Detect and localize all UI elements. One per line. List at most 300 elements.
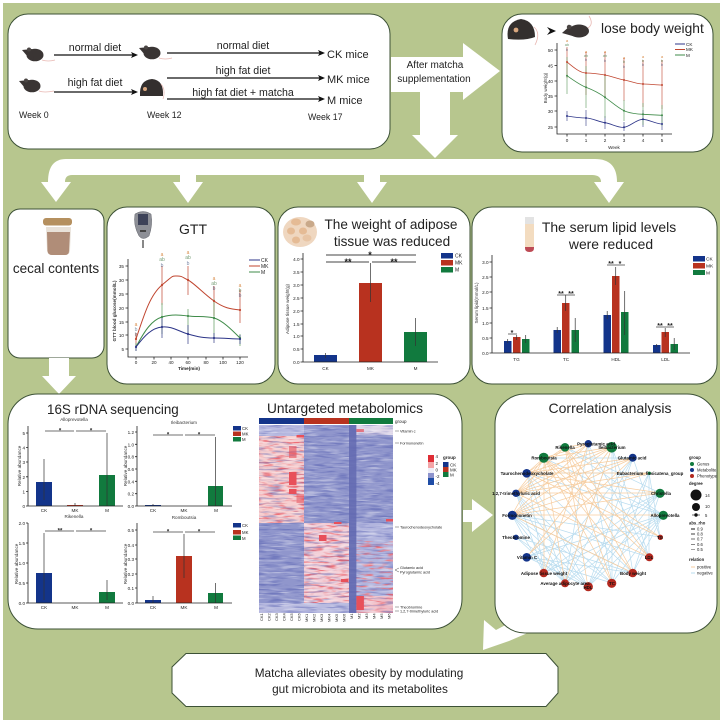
line chart: body weight: b	[566, 47, 569, 52]
line chart: body weight: Week	[608, 145, 621, 150]
legend: MK	[706, 264, 714, 270]
arrow: cecal to sequencing	[42, 358, 76, 394]
network legend: negative	[697, 570, 714, 576]
line chart: body weight: 40	[548, 79, 553, 84]
bar chart: Romboutsia: CK	[150, 605, 157, 610]
network nodes	[508, 440, 668, 591]
network node labels: Christella	[651, 491, 672, 496]
bar chart: serum lipids: TG	[513, 357, 520, 362]
bar chart: adipose weight: 1.0	[293, 334, 300, 339]
bar chart: Alloprevotella: Relative abundance	[17, 445, 22, 486]
line chart: body weight: 45	[548, 64, 553, 68]
bar chart: Ileibacterium: *	[198, 432, 201, 438]
line chart: GTT: b	[161, 263, 164, 269]
bar chart: Rikenella: 1.0	[19, 561, 25, 566]
legend: MK	[242, 530, 249, 535]
network node labels: Alloprevotella	[650, 513, 680, 518]
panel: cecal contents	[8, 209, 104, 358]
line chart: GTT: a	[213, 276, 216, 282]
line chart: body weight: a	[604, 49, 607, 54]
network legend: degree	[689, 481, 703, 486]
conclusion text	[255, 666, 463, 696]
conclusion text: Matcha alleviates obesity by modulating	[255, 666, 463, 680]
network node labels: Rikenella	[555, 445, 575, 450]
bar chart: Ileibacterium: Relative abundance	[123, 445, 128, 486]
week labels: Week 17	[308, 112, 343, 122]
line chart: GTT: a	[187, 250, 190, 256]
line chart: body weight: 50	[548, 48, 553, 53]
line chart: body weight: b	[623, 64, 626, 69]
line chart: body weight: 3	[623, 138, 626, 143]
bar chart: serum lipids: *	[619, 261, 622, 268]
legend: MK	[261, 264, 269, 270]
heatmap column labels: MK4	[326, 613, 332, 622]
heading: 16S: 16S rDNA sequencing	[47, 402, 179, 417]
heatmap column labels: CK1	[259, 612, 264, 621]
bar chart: Ileibacterium	[123, 420, 232, 513]
line chart: body weight: b	[604, 58, 607, 63]
bar chart: adipose weight	[285, 250, 438, 371]
line chart: body weight: 5	[661, 138, 664, 143]
bar chart: Ileibacterium: 1.2	[128, 430, 134, 435]
legend: M	[706, 270, 710, 276]
heatmap color scale: 4	[436, 454, 438, 459]
bar chart: Alloprevotella: 4	[22, 446, 25, 451]
network node labels: TC	[609, 581, 616, 586]
network legend: group	[689, 455, 701, 460]
line chart: GTT: 30	[119, 278, 124, 283]
network edges	[512, 444, 663, 587]
bar chart: serum lipids: 3.0	[482, 260, 489, 265]
line chart: GTT: GTT blood glucose(mmol/L)	[112, 280, 117, 342]
panel: lose body weight	[502, 14, 713, 152]
legend: CK	[242, 523, 248, 528]
bar chart: serum lipids: **	[558, 291, 564, 298]
bar chart: adipose weight: **	[344, 257, 352, 267]
bar chart: adipose weight: 2.0	[293, 309, 300, 314]
heatmap group legend: group	[443, 455, 456, 460]
heading: Correlation analysis	[549, 400, 671, 416]
bar chart: adipose weight: M	[414, 366, 418, 371]
line chart: body weight: 25	[548, 125, 553, 130]
heatmap group legend: M	[450, 472, 454, 478]
icon: mouse week 12 normal	[139, 46, 172, 59]
network node labels: Ileibacterium	[598, 445, 626, 450]
legend: CK	[242, 426, 248, 431]
network legend: abs_rho	[689, 520, 706, 526]
line chart: GTT: ab	[159, 257, 165, 263]
bar chart: serum lipids: *	[511, 330, 514, 337]
diet labels	[68, 40, 294, 99]
legend	[675, 42, 694, 58]
bar chart: Rikenella: **	[58, 528, 63, 534]
line chart: body weight: b	[623, 59, 626, 64]
group labels: MK mice	[327, 74, 370, 86]
diet labels: high fat diet + matcha	[192, 87, 294, 99]
bar chart: adipose weight: *	[368, 250, 372, 260]
bar chart: adipose weight: 3.5	[293, 270, 300, 275]
line chart: body weight: a	[661, 54, 664, 59]
bar chart: Alloprevotella: 5	[22, 431, 25, 436]
bar chart: serum lipids: LDL	[661, 357, 670, 362]
bar chart: Rikenella: 0.5	[19, 581, 25, 586]
heatmap column labels: M2	[356, 613, 362, 619]
heading: were reduced	[568, 236, 653, 252]
bar chart: Rikenella: MK	[72, 605, 79, 610]
legend: M	[261, 270, 265, 276]
bar chart: Rikenella: 0.0	[19, 601, 25, 606]
network node labels: 1,2,7-trimethyluric acid	[492, 491, 540, 496]
panel: serum lipid	[472, 207, 717, 384]
heading: cecal contents	[13, 261, 99, 276]
legend	[249, 258, 269, 276]
bar chart: serum lipids: 1.5	[482, 306, 489, 311]
bar chart: Alloprevotella: 2	[22, 475, 25, 480]
line chart: GTT: 15	[119, 320, 124, 325]
group labels: CK mice	[327, 49, 369, 61]
line chart: GTT: 40	[168, 360, 174, 365]
icon: obese mouse	[140, 79, 164, 99]
heatmap: group	[395, 419, 407, 424]
panel: GTT	[107, 207, 275, 384]
heatmap annotations: Theobromine	[400, 606, 422, 610]
arrow: after matcha supplementation: supplementation	[397, 74, 471, 85]
heatmap column labels: CK6	[296, 612, 302, 621]
bar chart: serum lipids: Serum lipid(mmol/L)	[474, 282, 479, 324]
bar chart: Rikenella: *	[90, 528, 93, 534]
bar chart: Romboutsia	[123, 515, 232, 610]
line chart: GTT: ab	[185, 255, 191, 261]
heatmap group legend: CK	[450, 462, 456, 468]
week labels	[19, 110, 343, 122]
heading: untargeted metabolomics: Untargeted metabolomics	[267, 401, 423, 416]
bar chart: serum lipids: **	[657, 323, 663, 330]
network legend: positive	[697, 564, 712, 570]
bar chart: Rikenella: Rikenella	[65, 514, 84, 519]
bar chart: adipose weight: 0.5	[293, 347, 300, 352]
bar chart: Romboutsia: 0.2	[128, 572, 134, 577]
group labels: M mice	[327, 95, 362, 107]
network node labels: Vitamin C	[517, 555, 538, 560]
bar chart: Alloprevotella: 0	[22, 504, 25, 509]
bar chart: adipose weight: 3.0	[293, 283, 300, 288]
heatmap annotations: Glutamic acid	[400, 566, 423, 570]
network node labels: Pyroglutamic acid	[577, 442, 615, 446]
line chart: body weight: b	[642, 62, 645, 67]
network node labels: Adipose tissue weight	[521, 571, 568, 576]
network legend: 0.6	[697, 542, 703, 547]
bar chart: Romboutsia: Relative abundance	[123, 543, 128, 584]
line chart: GTT: b	[239, 293, 242, 299]
bar chart: adipose weight: Adipose tissue weight(g)	[285, 284, 290, 334]
network node labels: LDL	[645, 555, 654, 560]
network node labels: Average adipocyte area	[540, 581, 590, 586]
line chart: body weight: a	[642, 54, 645, 59]
line chart: GTT: a	[135, 322, 138, 328]
heatmap column labels: MK3	[319, 613, 324, 622]
network legend: 0.5	[697, 547, 703, 552]
line chart: GTT: b	[213, 286, 216, 292]
line chart: body weight: 2	[604, 138, 607, 143]
network node labels: Body weight	[620, 571, 647, 576]
bar chart: adipose weight: CK	[322, 366, 330, 371]
network legend: Phenotype	[697, 474, 718, 478]
line chart: body weight: 1	[585, 138, 588, 143]
bar chart: adipose weight: MK	[367, 366, 375, 371]
bar chart: Romboutsia: 0.0	[128, 601, 134, 606]
legend: CK	[686, 42, 693, 47]
network legend: 0.7	[697, 536, 703, 542]
heatmap column labels: CK5	[289, 612, 294, 621]
bar chart: Ileibacterium: 1.0	[128, 442, 134, 447]
panel: experimental design	[8, 14, 390, 149]
arrow: to correlation	[463, 499, 493, 532]
bar chart: serum lipids: **	[568, 291, 574, 298]
legend	[233, 523, 249, 541]
legend: M	[242, 536, 246, 541]
bar chart: serum lipids: 0.5	[482, 336, 489, 341]
network node labels: Romboutsia	[531, 456, 557, 460]
heatmap	[259, 418, 407, 613]
arrows: diet	[54, 53, 323, 99]
legend: CK	[455, 254, 463, 260]
line chart: body weight: ab	[565, 42, 570, 47]
line chart: body weight: Body weight(g)	[543, 72, 548, 103]
panel: correlation analysis	[492, 394, 718, 633]
bar chart: Romboutsia: *	[167, 530, 170, 536]
icon: glucose meter	[134, 212, 152, 248]
line chart: GTT: b	[187, 261, 190, 267]
bar chart: serum lipids: TC	[563, 357, 570, 362]
network legend: 14	[705, 493, 710, 498]
bar chart: serum lipids: 2.5	[482, 275, 489, 280]
arrow	[547, 27, 556, 35]
bar chart: serum lipids: 0.0	[482, 351, 489, 356]
heatmap annotations: Taurochenodeoxycholate	[400, 526, 442, 530]
heading: The weight of adipose	[324, 217, 458, 232]
heading: lose body weight	[601, 21, 704, 36]
line chart: GTT: 80	[203, 360, 209, 365]
line chart: GTT: 60	[185, 360, 191, 365]
bar chart: Ileibacterium: 0.8	[128, 455, 134, 460]
bar chart: serum lipids: 2.0	[482, 290, 489, 295]
line chart: GTT: 25	[119, 292, 124, 297]
bar chart: serum lipids: HDL	[611, 357, 621, 362]
network legend	[689, 455, 718, 576]
legend: CK	[706, 256, 713, 262]
heatmap annotations: Formononetin	[400, 442, 423, 446]
bar chart: Romboutsia: Romboutsia	[172, 515, 197, 520]
icon: mouse week 0 high fat	[19, 78, 54, 92]
bar chart: Ileibacterium: CK	[150, 508, 157, 513]
line chart: GTT: b	[239, 288, 242, 294]
legend	[693, 256, 714, 276]
line chart: GTT: a	[161, 252, 164, 258]
bar chart: Ileibacterium: 0.4	[128, 479, 134, 484]
bar chart: Ileibacterium: 0.6	[128, 467, 134, 472]
heatmap color scale	[428, 454, 440, 486]
bar chart: Romboutsia: M	[214, 605, 218, 610]
legend	[233, 426, 249, 442]
legend: MK	[686, 47, 694, 52]
line chart: body weight: 0	[566, 138, 569, 143]
line chart: GTT: 35	[119, 264, 124, 269]
bar chart: Romboutsia: MK	[181, 605, 188, 610]
diet labels: high fat diet	[216, 65, 270, 77]
heatmap column labels: M5	[379, 613, 384, 619]
heatmap annotations: Pyroglutamic acid	[400, 570, 430, 574]
network node labels: Formononetin	[502, 513, 532, 518]
bar chart: Alloprevotella: 3	[22, 460, 25, 465]
bar chart: Rikenella: CK	[41, 605, 48, 610]
network legend: relation	[689, 557, 705, 562]
week labels: Week 0	[19, 110, 49, 120]
bar chart: Rikenella: 2.0	[19, 521, 25, 526]
legend	[441, 253, 463, 274]
heading: The serum lipid levels	[542, 219, 676, 235]
week labels: Week 12	[147, 110, 182, 120]
network node labels: Glutamic acid	[618, 456, 647, 460]
heatmap column labels: MK2	[312, 613, 316, 622]
bar chart: Ileibacterium: Ileibacterium	[171, 420, 197, 425]
bar chart: Romboutsia: *	[198, 530, 201, 536]
network node labels: Taurochenodeoxycholate	[501, 471, 554, 476]
bar chart: Ileibacterium: *	[167, 432, 170, 438]
bar chart: Alloprevotella: Alloprevotella	[60, 417, 88, 422]
line chart: GTT	[112, 250, 248, 371]
line chart: body weight: b	[661, 58, 664, 63]
heatmap column labels: MK6	[342, 613, 346, 622]
heatmap annotations	[395, 430, 442, 614]
bar chart: Romboutsia: 0.4	[128, 543, 134, 548]
heatmap column labels: CK3	[274, 612, 279, 621]
legend: MK	[455, 260, 463, 266]
bar chart: serum lipids: **	[667, 323, 673, 330]
line chart: body weight: 4	[642, 138, 645, 143]
bar chart: adipose weight: 2.5	[293, 296, 300, 301]
icon: lean mouse	[562, 16, 591, 38]
heatmap group legend	[443, 455, 457, 478]
line chart: GTT: b	[135, 332, 138, 338]
heatmap color scale: -2	[436, 474, 440, 479]
line chart: body weight: ab	[584, 53, 589, 58]
heatmap column labels: M3	[364, 613, 369, 619]
heatmap column labels	[259, 612, 392, 622]
network legend: Genus	[697, 462, 709, 466]
legend: M	[686, 53, 690, 58]
heatmap group legend: MK	[450, 468, 457, 472]
network legend: 0.8	[697, 532, 703, 536]
bar chart: Rikenella: 1.5	[19, 541, 25, 546]
diet labels: high fat diet	[68, 77, 122, 89]
network node labels: TG	[657, 535, 664, 540]
arrow: after matcha supplementation	[391, 43, 500, 158]
heading	[542, 219, 676, 252]
bar chart: Ileibacterium: MK	[181, 508, 188, 513]
heatmap column labels: M6	[386, 613, 392, 619]
legend: CK	[261, 258, 269, 264]
heatmap column labels: MK1	[304, 613, 309, 622]
network node labels: HDL	[583, 585, 593, 590]
line chart: body weight: a	[566, 38, 569, 43]
line chart: body weight: 30	[548, 109, 553, 114]
heatmap annotations: Vitamin c	[400, 430, 416, 434]
bar chart: adipose weight: **	[390, 257, 398, 267]
network node labels	[492, 442, 684, 590]
heatmap color scale: -4	[436, 481, 440, 486]
bar chart: Ileibacterium: 0.0	[128, 504, 134, 509]
icon: adipose tissue dish	[283, 217, 317, 247]
bar chart: Alloprevotella: *	[90, 428, 93, 434]
line chart: GTT: 20	[119, 306, 124, 311]
bar chart: Rikenella: Relative abundance	[14, 543, 19, 584]
line chart: GTT: a	[239, 283, 242, 289]
network legend: 0.9	[697, 526, 703, 532]
bar chart: adipose weight: 0.0	[293, 360, 300, 365]
bar chart: Romboutsia: 0.1	[128, 586, 134, 591]
bar chart: Rikenella	[14, 514, 123, 610]
heading	[324, 217, 458, 249]
diet labels: normal diet	[69, 42, 121, 54]
line chart: body weight: b	[661, 62, 664, 67]
bar chart: Alloprevotella: M	[105, 508, 109, 513]
network legend: 5	[705, 513, 708, 518]
line chart: GTT: 10	[119, 333, 124, 338]
arrow: after matcha supplementation: After matcha	[407, 60, 464, 71]
heatmap color scale: 0	[436, 468, 438, 472]
line chart: GTT: ab	[211, 281, 217, 287]
line chart: GTT: 120	[236, 360, 244, 365]
line chart: body weight: 35	[548, 94, 553, 99]
icon: sample cup	[43, 218, 72, 255]
line chart: body weight	[543, 38, 672, 150]
network legend: 10	[705, 504, 710, 509]
bar chart: serum lipids	[474, 255, 690, 362]
network node labels: Theobromine	[502, 535, 530, 540]
network node labels: Eubacterium_fissicatena_group	[617, 471, 684, 476]
heatmap column labels: CK2	[266, 612, 272, 621]
heatmap column labels: M1	[349, 613, 354, 619]
bar chart: Ileibacterium: M	[214, 508, 218, 513]
bar chart: serum lipids: 1.0	[482, 321, 489, 326]
line chart: body weight: a	[585, 49, 588, 54]
group labels	[327, 49, 370, 107]
diet labels: normal diet	[217, 40, 269, 52]
line chart: GTT: 20	[151, 360, 157, 365]
network legend: Metabolite	[697, 468, 717, 472]
heatmap column labels: M4	[372, 613, 376, 619]
line chart: GTT: 5	[121, 347, 124, 352]
heading: GTT	[179, 221, 207, 237]
legend: M	[455, 268, 459, 274]
bar chart: Alloprevotella: MK	[72, 508, 79, 513]
arrow: to conclusion	[483, 618, 530, 650]
bar chart: Alloprevotella	[17, 417, 123, 513]
bar chart: Alloprevotella: 1	[22, 489, 25, 494]
line chart: GTT: Time(min)	[178, 366, 200, 371]
bar chart: serum lipids: **	[608, 261, 614, 268]
bar chart: Alloprevotella: CK	[41, 508, 48, 513]
bar chart: adipose weight: 1.5	[293, 322, 300, 327]
bar chart: Rikenella: M	[105, 605, 109, 610]
icon: mouse week 0 normal	[22, 48, 55, 61]
line chart: body weight: a	[623, 55, 626, 60]
bar chart: Romboutsia: 0.5	[128, 528, 134, 533]
legend: MK	[242, 432, 249, 436]
line chart: GTT: 0	[135, 360, 138, 365]
arrow: distribution bar	[41, 159, 624, 203]
heatmap column labels: MK5	[334, 613, 339, 622]
